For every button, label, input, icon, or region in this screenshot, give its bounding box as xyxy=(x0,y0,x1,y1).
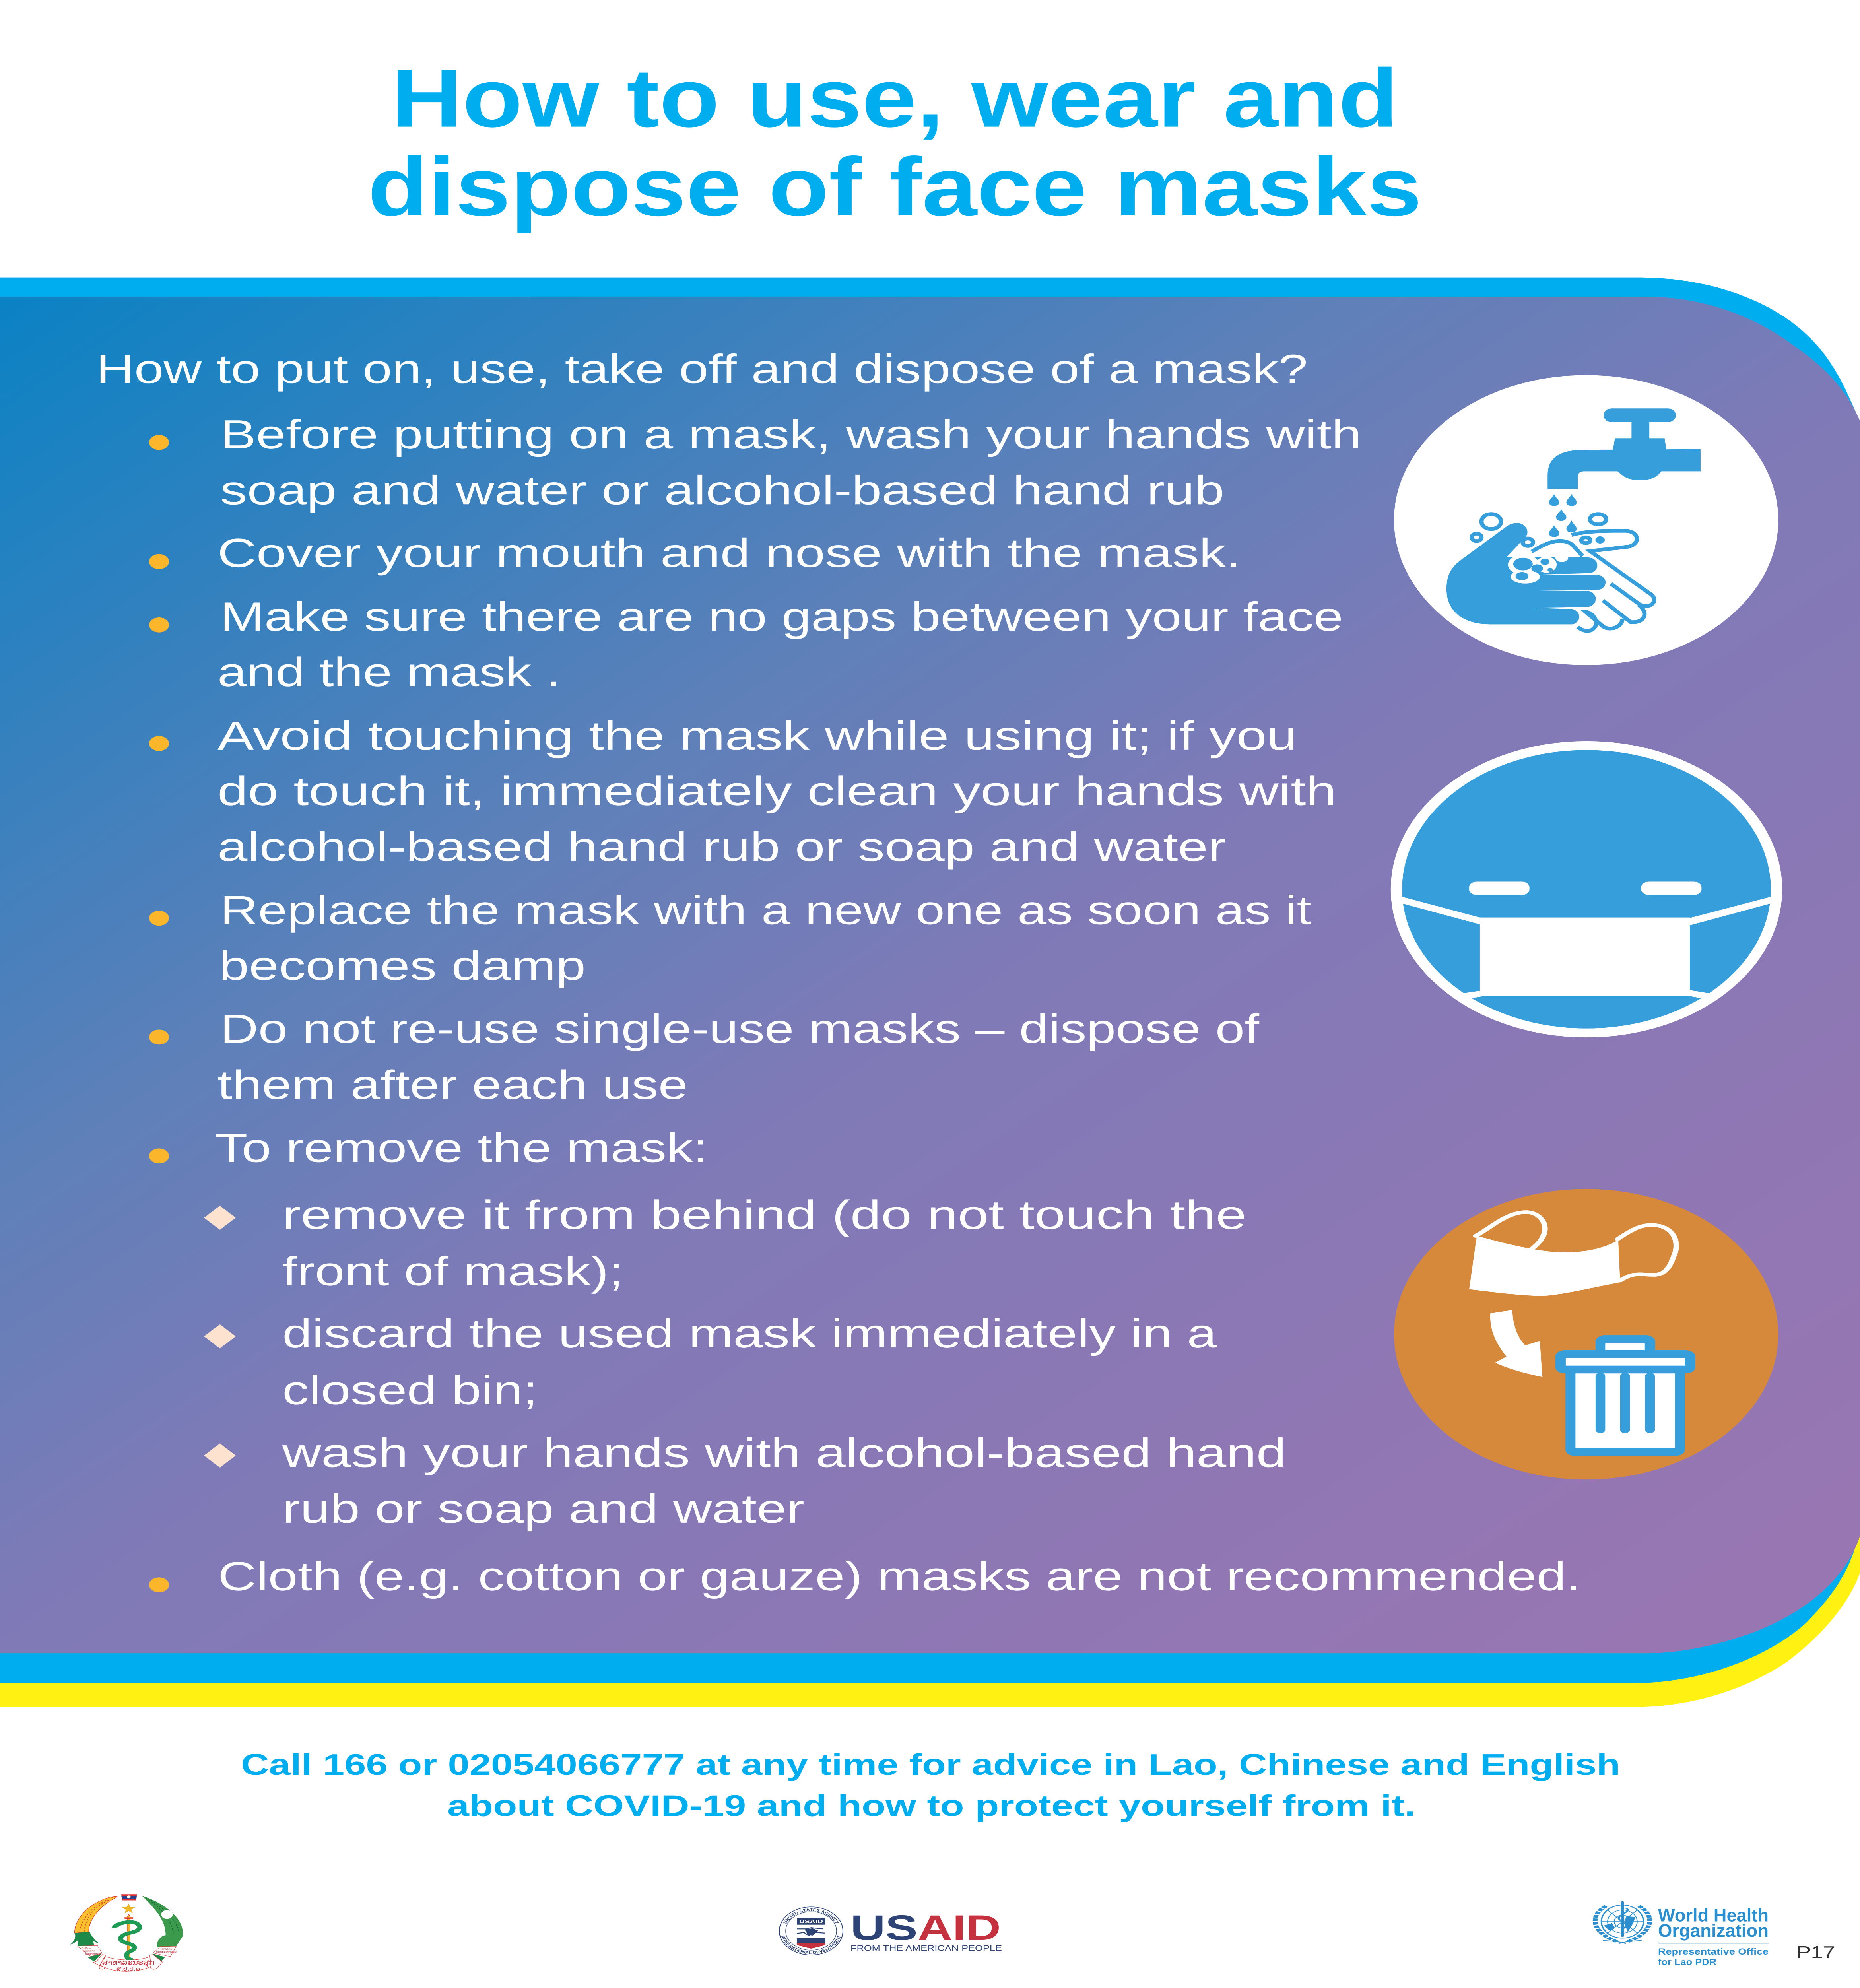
WHO emblem xyxy=(1595,1902,1650,1943)
title: How to use, wear and xyxy=(391,52,1398,144)
list: mask instructions xyxy=(149,412,1581,1599)
bullet: no re-use: them after each use xyxy=(217,1062,688,1108)
logo: World Health Organization: Organization xyxy=(1658,1921,1769,1941)
sub-bullet: wash hands xyxy=(204,1430,1286,1532)
bullet: no re-use xyxy=(149,1006,1260,1108)
logo: Lao Ministry of Health: ເອກະພາບ xyxy=(160,1947,173,1950)
bullet: no re-use: Do not re-use single-use masks – dispose of xyxy=(220,1006,1260,1052)
bullet: avoid touching: do touch it, immediately clean your hands with xyxy=(217,768,1336,814)
sub-bullet: wash hands: rub or soap and water xyxy=(282,1486,804,1532)
bullet: avoid touching: Avoid touching the mask while using it; if you xyxy=(217,713,1297,759)
bullet: wash hands: Before putting on a mask, wash your hands with xyxy=(220,412,1361,457)
bullet: cover mouth and nose: Cover your mouth and nose with the mask. xyxy=(217,530,1241,576)
bullet: cloth masks: Cloth (e.g. cotton or gauze) masks are not recommended. xyxy=(218,1553,1581,1599)
bullet: replace when damp: Replace the mask with a new one as soon as it xyxy=(220,887,1311,933)
bullet: no gaps: and the mask . xyxy=(217,649,561,695)
sub-bullet: wash hands: wash your hands with alcohol-based hand xyxy=(282,1430,1286,1476)
bullet: no gaps: Make sure there are no gaps between your face xyxy=(220,594,1343,639)
sub-bullet: remove from behind xyxy=(204,1192,1246,1294)
bullet: avoid touching: alcohol-based hand rub or soap and water xyxy=(217,824,1226,870)
logo: World Health Organization: Representative Office xyxy=(1658,1947,1769,1957)
callout: helpline xyxy=(241,1748,1620,1823)
sub-bullet: discard: closed bin; xyxy=(282,1367,538,1413)
sub-bullet: discard: discard the used mask immediately in a xyxy=(282,1310,1217,1356)
bullet: avoid touching xyxy=(149,713,1336,870)
logo: World Health Organization: for Lao PDR xyxy=(1658,1957,1716,1967)
logo: Lao Ministry of Health: ສັນຕິພາບ xyxy=(81,1947,93,1950)
logo: World Health Organization: World Health xyxy=(1658,1905,1769,1926)
sub-bullet: remove from behind: remove it from behind (do not touch the xyxy=(282,1192,1246,1238)
sub-bullet: discard xyxy=(204,1310,1217,1413)
bullet: replace when damp xyxy=(149,887,1311,988)
logo: Lao Ministry of Health: ເອກະລາດ xyxy=(83,1949,95,1952)
USAID seal: INTERNATIONAL DEVELOPMENT xyxy=(780,1935,842,1955)
bin xyxy=(1555,1335,1695,1456)
title xyxy=(368,52,1422,233)
mask xyxy=(1469,1212,1676,1296)
logo: Lao Ministry of Health xyxy=(70,1894,183,1972)
USAID seal: UNITED STATES AGENCY xyxy=(783,1908,839,1924)
arrow xyxy=(1490,1310,1542,1377)
logo: USAID xyxy=(779,1907,1002,1955)
bullet: no gaps xyxy=(149,594,1343,695)
panel: coloured bands and gradient background xyxy=(0,278,1860,1707)
title: dispose of face masks xyxy=(368,141,1422,233)
icon: face with mask xyxy=(1391,741,1782,1037)
page number: P17 xyxy=(1796,1943,1835,1962)
icon: discard mask in bin xyxy=(1394,1189,1778,1479)
bullet: removal heading: To remove the mask: xyxy=(215,1125,708,1171)
logo: World Health Organization xyxy=(1595,1902,1769,1967)
sub-bullet: remove from behind: front of mask); xyxy=(282,1248,623,1294)
logo: USAID: FROM THE AMERICAN PEOPLE xyxy=(850,1943,1002,1953)
logo: USAID: USAID xyxy=(850,1908,1001,1948)
icon: hand washing xyxy=(1394,375,1778,665)
USAID seal: USAID xyxy=(799,1919,823,1924)
logo: Lao Ministry of Health: ປະຊາທິປະໄຕ xyxy=(85,1952,101,1955)
bullet: wash hands: soap and water or alcohol-based hand rub xyxy=(220,467,1224,513)
bullet: wash hands xyxy=(149,412,1361,513)
logo: Lao Ministry of Health: ວັດທະນະຖາວອນ xyxy=(156,1951,177,1953)
callout: helpline: Call 166 or 02054066777 at any time for advice in Lao, Chinese and English xyxy=(241,1748,1620,1781)
text block: heading question: How to put on, use, take off and dispose of a mask? xyxy=(96,346,1308,392)
USAID seal xyxy=(779,1907,843,1955)
callout: helpline: about COVID-19 and how to protect yourself from it. xyxy=(447,1789,1415,1823)
bullet: replace when damp: becomes damp xyxy=(219,943,586,988)
logo: Lao Ministry of Health: ສ.ປ.ປ.ລ xyxy=(116,1966,140,1972)
logo: Lao Ministry of Health: ສາທາລະນະສຸກ xyxy=(102,1959,155,1967)
